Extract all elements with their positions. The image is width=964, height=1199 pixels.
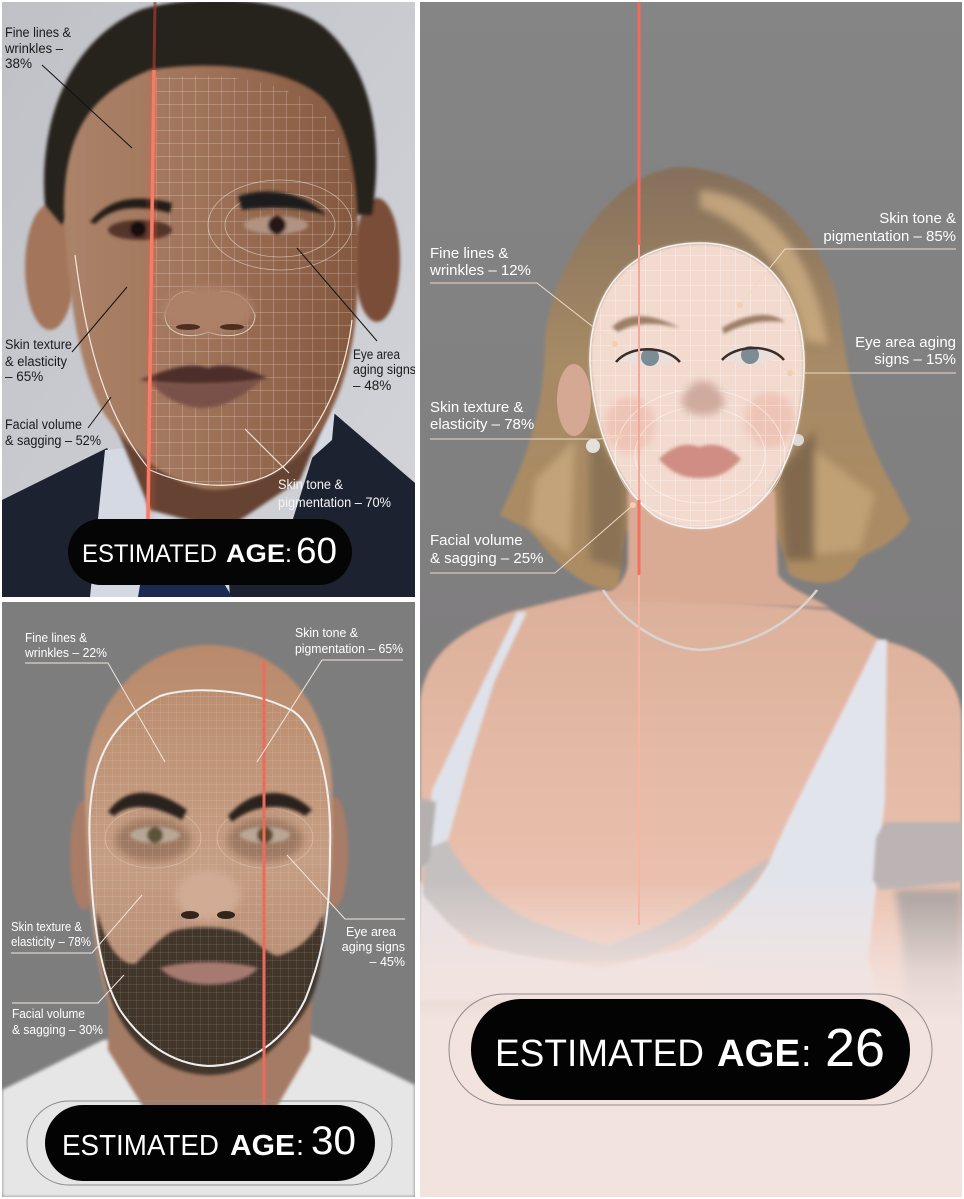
facial wireframe mesh [590, 243, 804, 528]
callout: skin texture and elasticity 78% [430, 399, 623, 439]
callout: fine lines and wrinkles 38%: wrinkles – [4, 41, 63, 56]
callout: fine lines and wrinkles 22% [24, 631, 165, 762]
portrait: woman in satin dress [419, 167, 962, 1199]
hair [500, 167, 910, 590]
age badge: 26 [449, 994, 932, 1105]
neck [108, 1000, 312, 1110]
age badge: 26: ESTIMATED [495, 1033, 704, 1075]
callout: facial volume and sagging 30%: Facial volume [12, 1007, 85, 1021]
callout: skin tone and pigmentation 65% [257, 626, 403, 762]
callout: skin tone and pigmentation 65%: Skin tone & [295, 626, 359, 640]
callout: skin texture and elasticity 78%: Skin texture & [430, 399, 523, 416]
hair highlights [530, 190, 875, 570]
eye sockets [115, 818, 303, 862]
callout: facial volume and sagging 52%: Facial volume [5, 417, 82, 432]
callout: skin tone and pigmentation 70% [245, 429, 391, 510]
ears [25, 198, 400, 330]
age badge: 26: : [801, 1033, 812, 1075]
callout: eye area aging signs 45%: aging signs [342, 940, 405, 954]
callout: facial volume and sagging 25%: Facial volume [430, 532, 523, 549]
satin dress [420, 612, 887, 1000]
nose [162, 286, 254, 334]
mouth [160, 962, 258, 984]
callout: eye area aging signs 48% [297, 248, 416, 393]
facial wireframe mesh [75, 70, 365, 495]
callout: skin tone and pigmentation 65%: pigmentation – 65% [295, 642, 403, 656]
callout: fine lines and wrinkles 12% [429, 245, 618, 347]
callout: eye area aging signs 45%: – 45% [370, 955, 405, 969]
t-shirt [2, 1033, 415, 1197]
callout: eye area aging signs 15%: signs – 15% [874, 351, 956, 368]
callout: skin texture and elasticity 78%: elasticity – 78% [11, 935, 91, 949]
age badge: 60: ESTIMATED [82, 540, 217, 568]
neck [600, 490, 830, 608]
callout: eye area aging signs 48%: – 48% [353, 378, 391, 393]
eyebrows [90, 192, 326, 224]
wireframe mesh and face outline [89, 690, 330, 1066]
callout: skin texture and elasticity 78%: elasticity – 78% [430, 416, 534, 433]
age badge: 60 [68, 519, 352, 585]
sequin neckline [423, 840, 770, 963]
necklace [603, 590, 817, 650]
callout: eye area aging signs 15%: Eye area aging [855, 334, 956, 351]
callout: eye area aging signs 15% [787, 334, 956, 376]
callout: facial volume and sagging 25% [430, 502, 636, 573]
callout: skin texture and elasticity 65%: & elasticity [5, 354, 67, 369]
callout: fine lines and wrinkles 38% [4, 25, 132, 148]
lips [659, 445, 741, 478]
right drape [580, 640, 887, 1000]
eyebrows [108, 793, 312, 822]
beard [97, 910, 323, 1075]
callout: fine lines and wrinkles 38%: Fine lines & [5, 25, 71, 40]
callout: skin tone and pigmentation 70%: Skin tone & [278, 477, 343, 492]
suit jacket [2, 408, 415, 597]
eyebrows [612, 315, 785, 334]
laser scan line [260, 660, 268, 1105]
age badge: 30 [27, 1101, 392, 1185]
callout: skin texture and elasticity 65%: Skin texture [5, 337, 72, 352]
panel: bottom-left portrait, estimated age 30 [2, 602, 415, 1197]
callout: skin texture and elasticity 65%: – 65% [5, 369, 43, 384]
left strap [430, 610, 528, 848]
age badge: 60: : [285, 540, 292, 568]
portrait: man in suit [2, 0, 415, 597]
nose [176, 870, 240, 920]
callout: facial volume and sagging 52%: & sagging – 52% [5, 433, 101, 448]
callout: fine lines and wrinkles 12%: Fine lines & [430, 245, 508, 262]
callout: eye area aging signs 48%: Eye area [353, 347, 400, 362]
arm background below band [895, 890, 962, 1000]
age badge: 60: 60 [296, 530, 337, 571]
shirt collar and tie [90, 408, 335, 597]
callout: fine lines and wrinkles 22%: Fine lines & [25, 631, 88, 645]
callout: skin tone and pigmentation 85% [737, 210, 956, 308]
face skin [64, 66, 358, 490]
callout: facial volume and sagging 30% [12, 975, 124, 1037]
callout: fine lines and wrinkles 22%: wrinkles – 22% [24, 646, 107, 660]
lower drape [420, 880, 678, 983]
callout: skin tone and pigmentation 85%: Skin tone & [879, 210, 956, 227]
callout: skin tone and pigmentation 70%: pigmentation – 70% [278, 495, 391, 510]
callout: skin texture and elasticity 65% [5, 287, 127, 384]
laser scan line [148, 2, 155, 520]
eyes [108, 216, 308, 240]
hair [44, 0, 376, 225]
eyes [130, 827, 290, 843]
age badge: 60: AGE [226, 540, 285, 568]
panel: right portrait, estimated age 26 [419, 2, 962, 1199]
neck [114, 410, 332, 519]
callout: fine lines and wrinkles 38%: 38% [5, 56, 32, 71]
age badge: 30: 30 [311, 1119, 356, 1163]
callout: facial volume and sagging 25%: & sagging – 25% [430, 550, 543, 567]
cheek blush [605, 392, 795, 453]
age badge: 26: AGE [717, 1033, 800, 1075]
sequin arm bands [419, 798, 962, 890]
fade to pale pink [420, 880, 962, 1020]
callout: eye area aging signs 45% [287, 855, 405, 969]
face skin [590, 243, 804, 528]
callout: facial volume and sagging 52% [5, 397, 111, 448]
callout: facial volume and sagging 30%: & sagging – 30% [12, 1023, 103, 1037]
callout: eye area aging signs 48%: aging signs [353, 362, 416, 377]
eyes [616, 346, 784, 366]
callout: skin tone and pigmentation 85%: pigmentation – 85% [823, 228, 956, 245]
nose [682, 381, 724, 415]
bald head and face [85, 645, 333, 1075]
age badge: 30: : [296, 1130, 304, 1162]
ear and earrings [557, 364, 804, 453]
callout: eye area aging signs 45%: Eye area [346, 925, 396, 939]
callout: skin texture and elasticity 78% [11, 895, 142, 953]
age badge: 30: AGE [230, 1130, 295, 1162]
age badge: 26: 26 [825, 1018, 885, 1078]
ears [70, 797, 348, 910]
callout: fine lines and wrinkles 12%: wrinkles – 12% [429, 262, 531, 279]
age badge: 30: ESTIMATED [62, 1130, 219, 1162]
shoulders and upper body [420, 590, 962, 1000]
callout: skin texture and elasticity 78%: Skin texture & [11, 920, 83, 934]
portrait: bald bearded man in white t-shirt [2, 645, 415, 1197]
mouth [140, 366, 268, 408]
laser scan line [636, 2, 642, 925]
panel: top-left portrait, estimated age 60 [2, 0, 416, 597]
